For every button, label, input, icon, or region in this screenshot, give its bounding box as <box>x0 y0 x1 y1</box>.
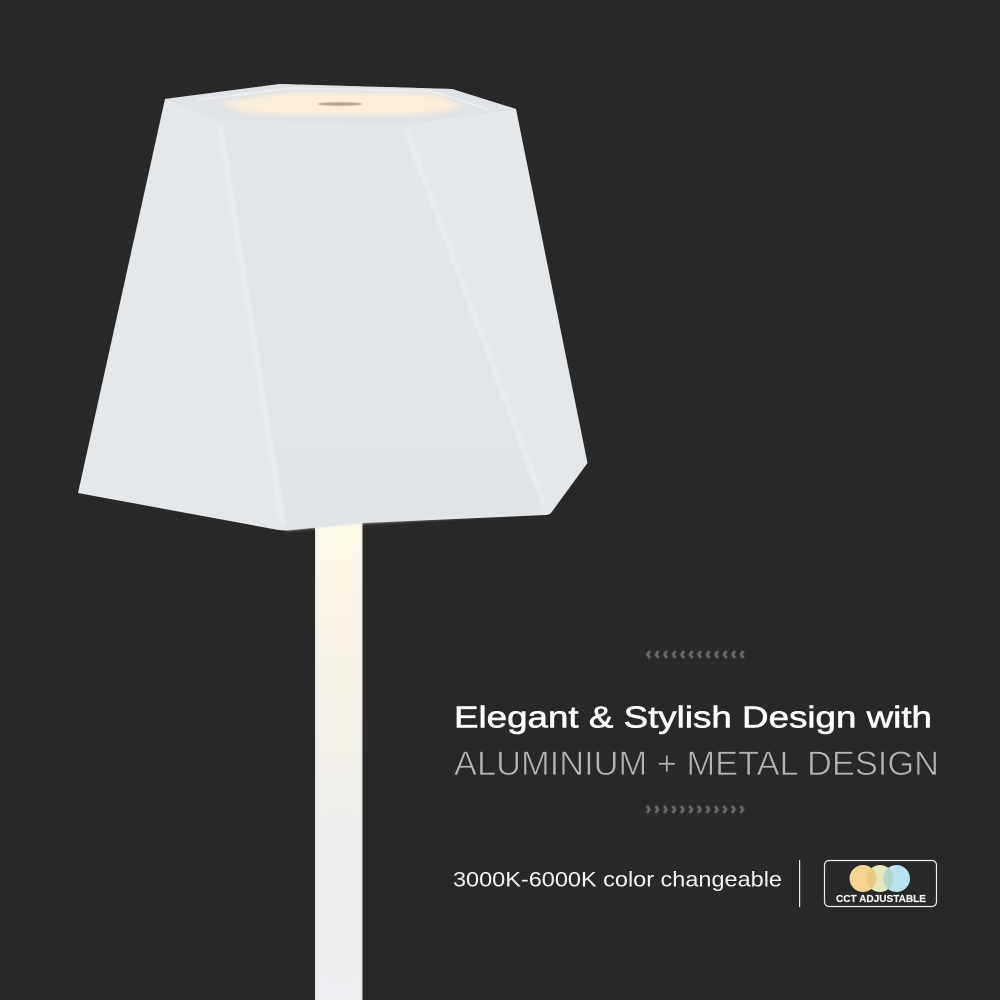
heading: Elegant & Stylish Design with <box>454 700 932 734</box>
vertical divider <box>799 860 800 907</box>
bottom chevron row <box>647 806 743 813</box>
lamp shade <box>78 84 588 530</box>
centre facet <box>218 120 546 530</box>
facet highlight: left edge <box>220 124 283 525</box>
lamp stem <box>315 518 362 1000</box>
facet highlight: right edge <box>406 130 544 505</box>
CCT adjustable badge <box>824 860 936 906</box>
rim highlight <box>198 88 488 109</box>
warm light glow <box>217 92 467 116</box>
centre hole <box>318 102 362 106</box>
top rim <box>165 84 516 125</box>
subheading: ALUMINIUM + METAL DESIGN <box>454 745 939 783</box>
colour temperature text: 3000K-6000K color changeable <box>453 868 782 892</box>
badge frame <box>824 860 936 906</box>
shade silhouette <box>78 84 588 530</box>
icon: overlapping colour circles <box>850 865 910 892</box>
top chevron row <box>648 651 744 658</box>
badge label: CCT ADJUSTABLE <box>836 894 926 905</box>
